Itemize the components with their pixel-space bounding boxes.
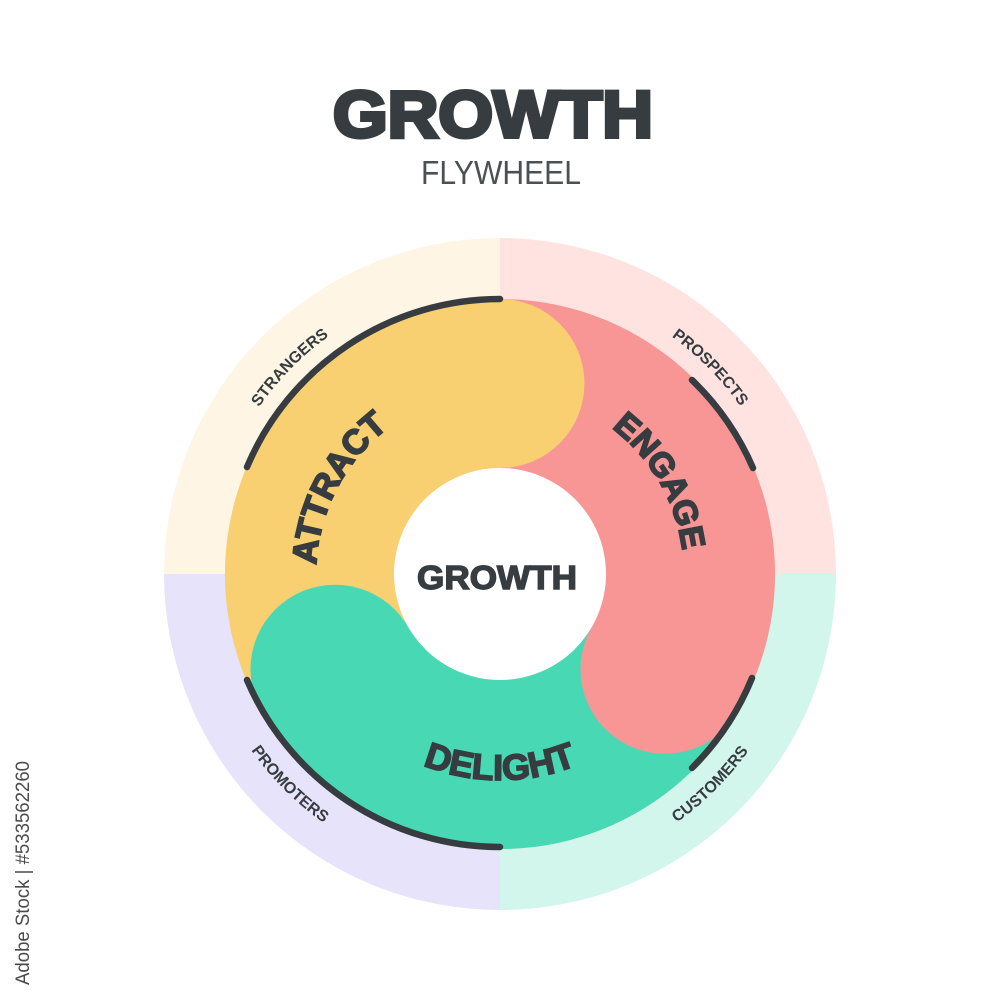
label: customers: CUSTOMERS — [672, 746, 747, 820]
dark arcs — [247, 299, 753, 847]
stock credit: Adobe Stock | #533562260 — [13, 761, 34, 985]
segment: delight — [262, 574, 738, 849]
label: prospects: PROSPECTS — [672, 328, 748, 405]
label: promoters: PROMOTERS — [252, 744, 328, 822]
label: engage: ENGAGE — [612, 410, 706, 550]
label: attract: ATTRACT — [292, 408, 384, 566]
label: strangers: STRANGERS — [252, 328, 328, 406]
segment head: attract — [416, 299, 584, 468]
center hub — [394, 468, 606, 680]
segment: attract — [225, 299, 500, 712]
outer ring quadrants — [164, 238, 836, 910]
subtitle: FLYWHEEL — [421, 154, 581, 191]
title: GROWTH — [333, 77, 653, 151]
label: delight: DELIGHT — [424, 741, 572, 781]
segment head: delight — [250, 585, 420, 754]
segment: engage — [500, 299, 775, 712]
flywheel segments — [225, 299, 775, 849]
segment head: engage — [580, 585, 750, 754]
center label: GROWTH — [417, 559, 577, 596]
